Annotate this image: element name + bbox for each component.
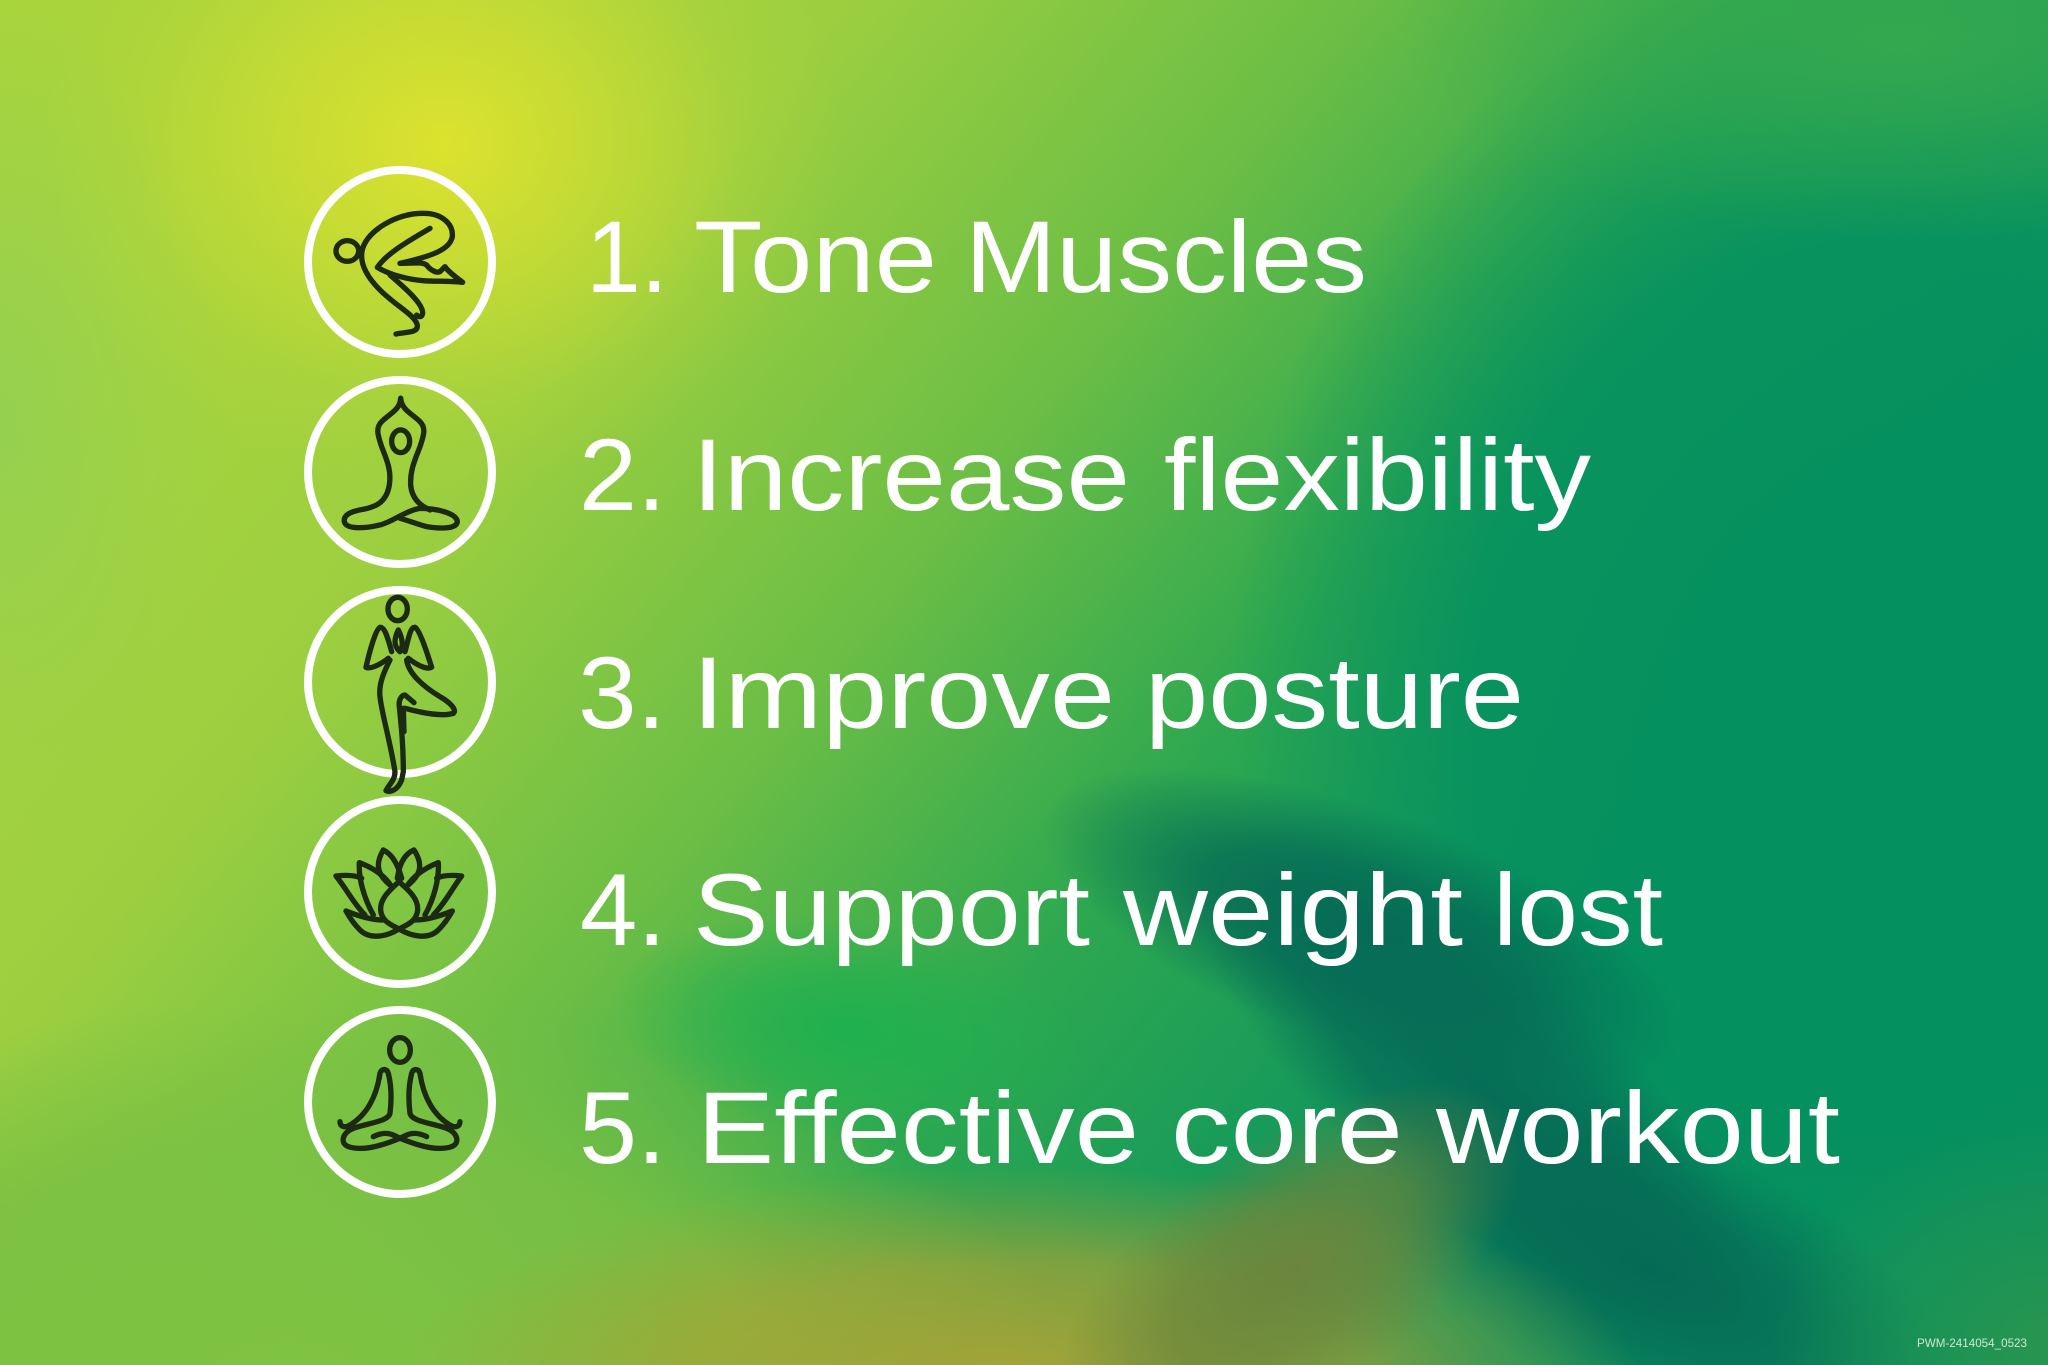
list item 4 <box>308 800 1663 984</box>
label 3 <box>578 636 1524 750</box>
label 5: Effective <box>697 1071 1139 1185</box>
label 4: 4. <box>580 853 666 967</box>
label 4: weight <box>1122 853 1463 967</box>
label 5: workout <box>1435 1071 1840 1185</box>
label 5 <box>579 1071 1840 1185</box>
icon: seated meditation pose <box>308 1010 492 1194</box>
list item 2 <box>308 380 1591 564</box>
icon: forward bend pose <box>308 170 492 354</box>
footer code: PWM-2414054_0523 <box>1917 1336 2027 1350</box>
label 5: 5. <box>579 1071 666 1185</box>
label 5: core <box>1171 1071 1403 1185</box>
icon: lotus flower <box>308 800 492 984</box>
label 2 <box>579 418 1591 532</box>
list item 5 <box>308 1010 1840 1194</box>
label 3: Improve <box>692 636 1115 750</box>
icon: seated arms overhead pose <box>308 380 492 564</box>
label 4: lost <box>1493 853 1663 967</box>
label 1: Muscles <box>965 200 1367 314</box>
label 3: 3. <box>578 636 666 750</box>
label 2: flexibility <box>1164 418 1591 532</box>
label 3: posture <box>1145 636 1524 750</box>
label 4 <box>580 853 1663 967</box>
label 4: Support <box>693 853 1090 967</box>
icon: tree pose <box>308 590 492 791</box>
label 1: 1. <box>586 200 668 314</box>
label 2: Increase <box>692 418 1130 532</box>
list item 3 <box>308 590 1524 791</box>
label 2: 2. <box>579 418 666 532</box>
label 1: Tone <box>694 200 937 314</box>
label 1 <box>586 200 1367 314</box>
list item 1 <box>308 170 1367 354</box>
